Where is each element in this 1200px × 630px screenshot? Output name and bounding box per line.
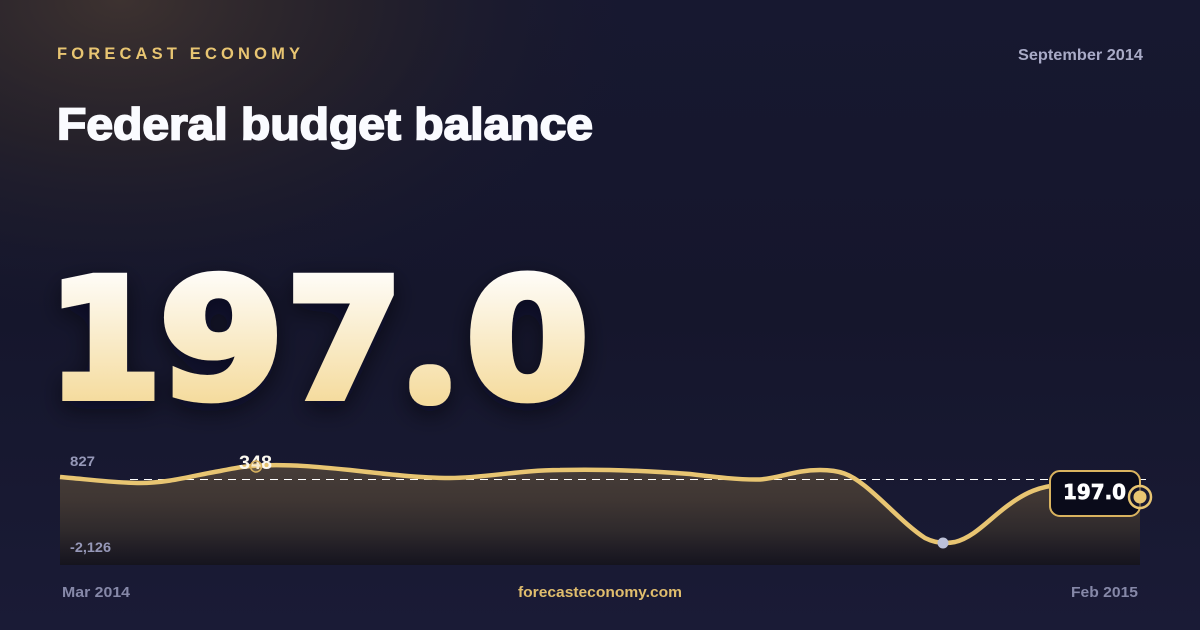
big value: 7 [286, 245, 403, 437]
brand label: FORECAST ECONOMY [57, 45, 300, 63]
big value: 1 [47, 244, 162, 436]
chart area fill [60, 465, 1140, 565]
current value marker [1129, 486, 1151, 508]
title: Federal budget balance [57, 100, 593, 150]
source site: forecasteconomy.com [518, 584, 682, 601]
peak marker [250, 461, 262, 472]
big value: 9 [159, 244, 284, 436]
peak label: 348 [239, 453, 272, 474]
big value: 0 [466, 244, 589, 437]
chart [60, 453, 1151, 565]
end date: Feb 2015 [1071, 584, 1138, 601]
axis max label: 827 [70, 453, 95, 469]
forecast line [60, 465, 1060, 543]
reference dashed line [130, 478, 1146, 480]
big value: . [424, 361, 436, 396]
axis min label: -2,126 [70, 539, 111, 555]
current value callout: 197.0 [1063, 480, 1126, 504]
low marker [938, 538, 948, 548]
current value callout [1050, 471, 1140, 516]
start date: Mar 2014 [62, 584, 131, 601]
big value [47, 244, 589, 437]
date label: September 2014 [1018, 47, 1143, 64]
